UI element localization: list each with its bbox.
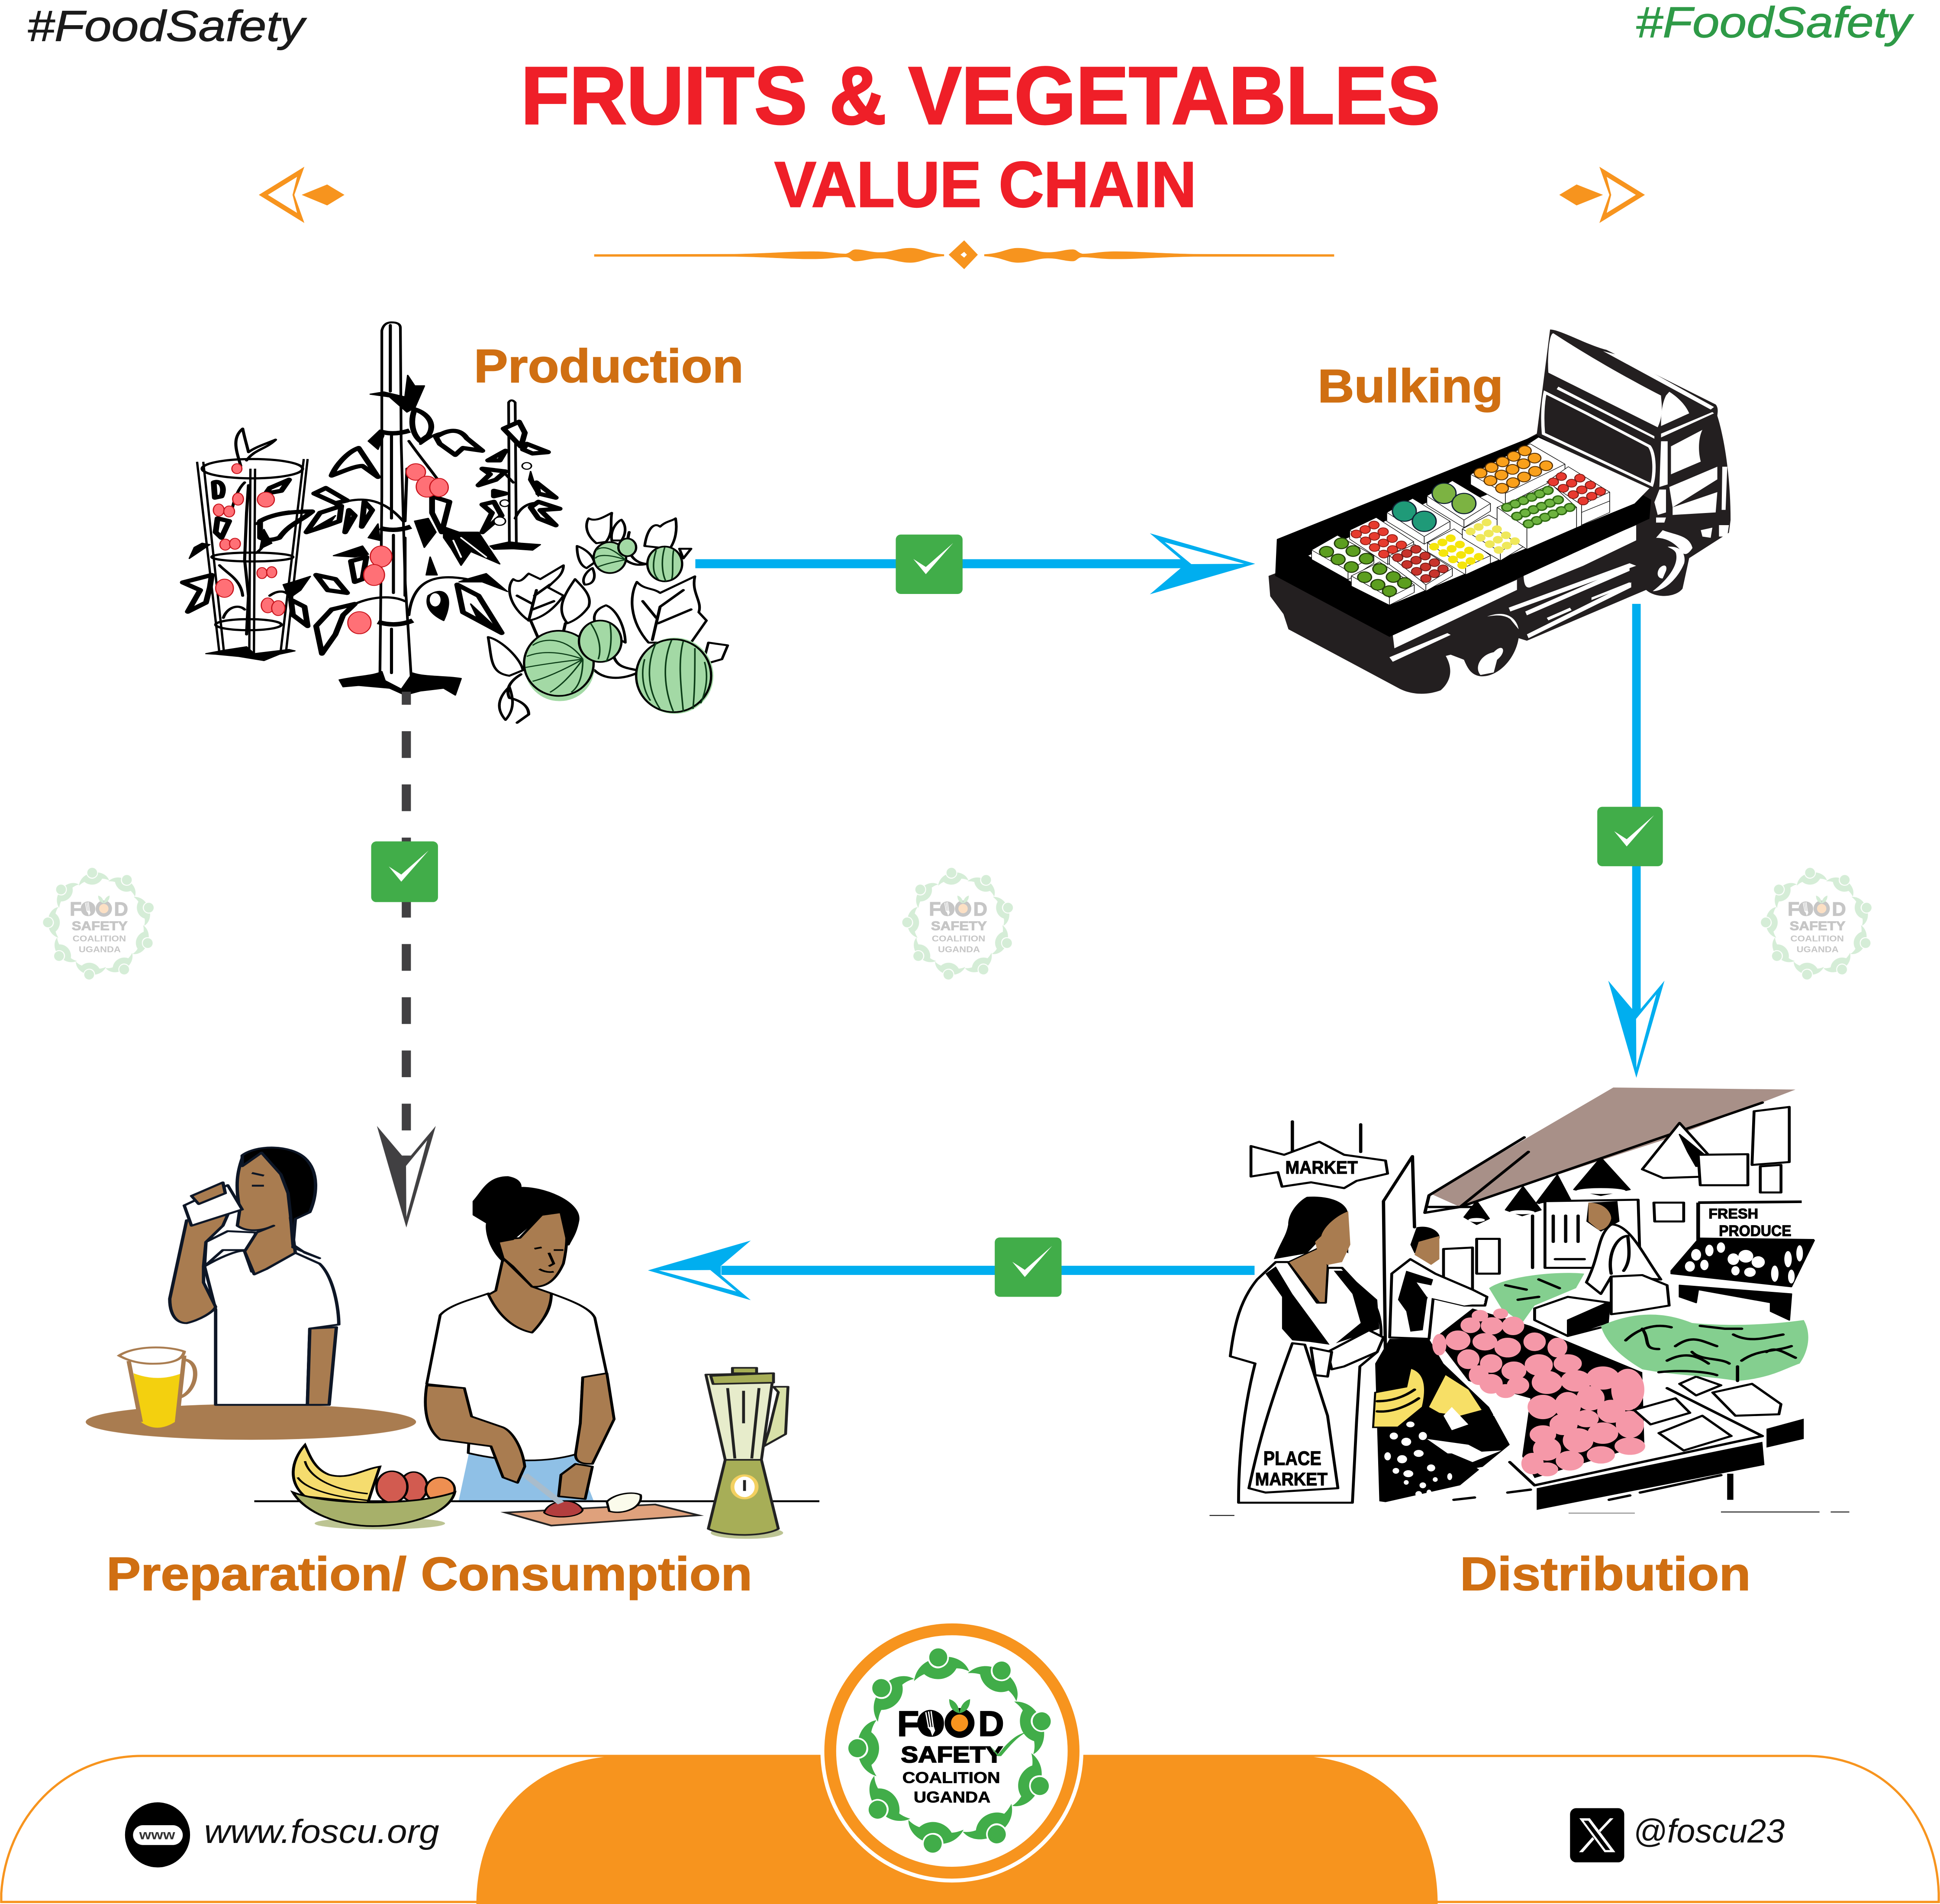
label: Preparation/ Consumption: Preparation/ Consumption [106, 1548, 752, 1601]
dark stall base [1375, 1339, 1510, 1502]
blender [706, 1368, 788, 1539]
title ornaments [259, 167, 1645, 269]
table [86, 1404, 416, 1440]
pink produce pile [1433, 1308, 1644, 1478]
website icon [125, 1802, 190, 1868]
watermark logo right: FOOD [1788, 898, 1846, 920]
watermark logo centre: COALITION [932, 934, 985, 944]
watermark logo right: SAFETY [1790, 920, 1845, 933]
wall signs [1444, 1107, 1789, 1291]
illustration: production plants and watermelons [183, 323, 728, 723]
fresh produce sign and crate: FRESH [1708, 1206, 1758, 1222]
fresh produce sign and crate [1671, 1202, 1814, 1320]
crate scale and boxes [1534, 1275, 1781, 1451]
awning [1431, 1088, 1795, 1207]
illustration: truck loaded with produce [1269, 329, 1731, 694]
logo wordmark: FOOD [897, 1704, 1004, 1743]
woman shopper: MARKET [1255, 1469, 1328, 1489]
woman drinking [170, 1148, 339, 1405]
woman shopper [1230, 1197, 1383, 1503]
fresh produce sign and crate: PRODUCE [1719, 1223, 1792, 1239]
arrow: distribution to consumption [648, 1237, 1254, 1300]
logo: food safety coalition uganda [820, 1620, 1083, 1882]
website icon: www [139, 1827, 175, 1842]
watermark logo left: UGANDA [79, 945, 121, 954]
label: Bulking: Bulking [1318, 360, 1503, 413]
market sign [1251, 1121, 1388, 1188]
vendor behind stall [1586, 1201, 1661, 1294]
counter line [254, 1500, 819, 1503]
label: Production: Production [474, 340, 744, 393]
logo wordmark: COALITION [902, 1769, 1000, 1787]
cutting board and apple [506, 1475, 699, 1526]
watermark logo right [1758, 867, 1877, 984]
woman cutting fruit [425, 1177, 614, 1501]
arrow: bulking to distribution [1597, 604, 1664, 1078]
watermelons with leaves [488, 513, 728, 723]
watermark logo left: COALITION [73, 934, 126, 944]
bananas [1373, 1368, 1482, 1427]
small staked tomato plant [478, 400, 560, 550]
illustration: market stall distribution [1209, 1088, 1850, 1516]
arrow: production to consumption (dashed) [371, 692, 438, 1227]
side pillar [1383, 1156, 1415, 1364]
market sign: MARKET [1286, 1158, 1358, 1178]
watermark logo left: FOOD [70, 898, 128, 920]
crates [1312, 444, 1610, 605]
label: Distribution: Distribution [1460, 1548, 1751, 1601]
dotted produce [1384, 1401, 1526, 1497]
arrow: production to bulking [695, 533, 1255, 594]
caged tomato plant [183, 429, 312, 661]
footer band outline [1, 1756, 1939, 1902]
woman shopper: PLACE [1263, 1447, 1321, 1469]
logo wordmark [897, 1699, 1027, 1806]
illustration: preparation and consumption [86, 1148, 819, 1539]
watermark logo right: UGANDA [1797, 945, 1839, 954]
cab windows and details [1389, 333, 1729, 675]
X icon [1570, 1808, 1624, 1862]
subtitle: VALUE CHAIN [774, 148, 1196, 220]
pumpkins [1392, 483, 1476, 532]
watermark logo centre: FOOD [929, 898, 987, 920]
website text: www.foscu.org [204, 1813, 439, 1850]
tall staked tomato plant [306, 323, 507, 695]
watermark logo centre: UGANDA [938, 945, 980, 954]
watermark logo left: SAFETY [72, 920, 128, 933]
truck bed [1275, 435, 1651, 637]
watermark logo centre: SAFETY [931, 920, 987, 933]
front lettuce [1601, 1315, 1808, 1381]
table front [1209, 1388, 1850, 1516]
juice jug [119, 1347, 195, 1428]
hanging lamps [1464, 1123, 1719, 1224]
truck body [1269, 329, 1731, 694]
back lettuce [1489, 1273, 1584, 1323]
watermark logo left [40, 867, 159, 984]
watermark logo right: COALITION [1790, 934, 1844, 944]
second customer [1390, 1227, 1487, 1339]
logo wordmark: UGANDA [914, 1789, 990, 1806]
logo wordmark: SAFETY [901, 1742, 1003, 1768]
watermark logo centre [899, 867, 1018, 984]
fruit bowl [293, 1445, 455, 1530]
title: FRUITS & VEGETABLES [521, 50, 1440, 141]
crate fruit [1327, 449, 1602, 591]
footer orange centre [477, 1756, 1437, 1904]
hashtag left: #FoodSafety [27, 2, 307, 50]
X handle: @foscu23 [1633, 1813, 1785, 1850]
